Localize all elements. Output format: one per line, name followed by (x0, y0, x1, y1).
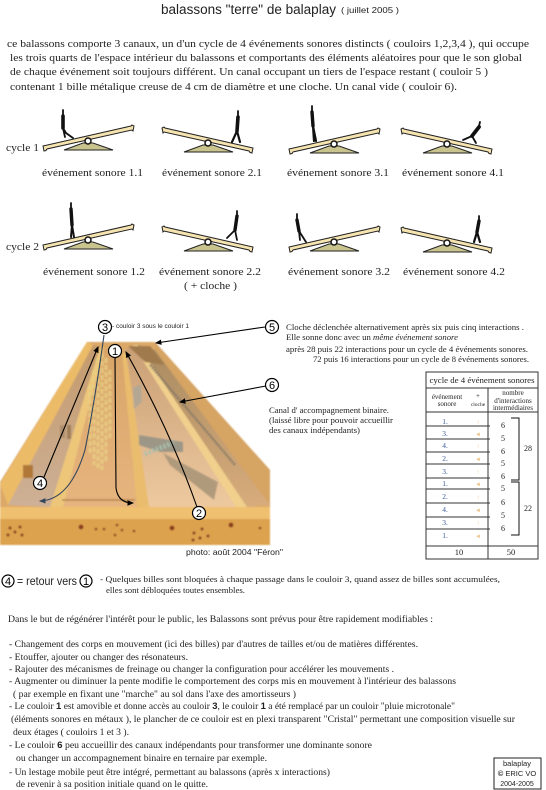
arrow corridor 4 (44, 347, 98, 477)
modifications text: deux étages ( couloirs 1 et 3 ). (13, 727, 129, 738)
marker 6: 6 (269, 380, 275, 392)
copyright box: balaplay (503, 759, 531, 768)
binary channel note (269, 405, 393, 435)
marker 2 (192, 506, 206, 520)
table bell arrows: ◄ (475, 457, 481, 463)
table title: cycle de 4 événement sonores (430, 375, 534, 385)
cycle table (426, 372, 538, 559)
legend: 4 returns to 1: 1 (83, 576, 89, 588)
event 4.1 (401, 122, 504, 179)
marker 3 note: - couloir 3 sous le couloir 1 (112, 324, 190, 330)
marker 1 (108, 344, 122, 358)
table event numbers: 3. (442, 429, 448, 438)
table bell arrows: ◄ (475, 534, 481, 540)
marker 3 (98, 320, 112, 334)
table bell arrows: ↑ (476, 470, 480, 476)
table event numbers: 1. (442, 417, 448, 426)
brackets with totals: 22 (524, 504, 532, 513)
marker 5: 5 (269, 322, 275, 334)
modifications text: - Le couloir 1 est amovible et donne accès au couloir 3, le couloir 1 a été remplacé par un couloir "pluie microtonale" (9, 701, 455, 712)
modifications text: - Changement des corps en mouvement (ici des billes) par d'autres de tailles et/ou de matières différentes. (9, 639, 418, 650)
modifications text: - Rajouter des mécanismes de freinage ou changer la configuration pour accélérer les mouvements . (9, 664, 394, 675)
binary channel note: Canal d' accompagnement binaire. (269, 405, 389, 415)
title: ( juillet 2005 ) (341, 5, 399, 15)
modifications text: - Un lestage mobile peut être intégré, permettant au balassons (après x interactions) (9, 767, 330, 778)
legend: 4 returns to 1 (2, 575, 92, 588)
event 2.2: événement sonore 2.2 (159, 266, 261, 278)
table event numbers: 2. (442, 492, 448, 501)
event 2.2 (159, 211, 261, 292)
modifications text: - Le couloir 6 peu accueillir des canaux indépendants pour transformer une dominante sonore (9, 740, 372, 751)
event 1.2 (43, 203, 145, 278)
arrow to corridor 5 (156, 327, 265, 343)
event 2.2: ( + cloche ) (184, 280, 237, 292)
note on blocked marbles (100, 574, 500, 595)
binary channel note: des canaux indépendants) (269, 425, 360, 435)
event 3.1: événement sonore 3.1 (287, 167, 389, 179)
intro text: contenant 1 bille métalique creuse de 4 cm de diamètre et une cloche. Un canal vide ( couloir 6). (10, 82, 457, 93)
event 4.2: événement sonore 4.2 (403, 266, 505, 278)
event 3.2 (288, 214, 390, 278)
bell explanation: Elle sonne donc avec un même événement sonore (286, 332, 458, 342)
table bell arrows: ↑ (476, 420, 480, 426)
event 2.1 (162, 111, 262, 179)
table bell arrows: ↑ (476, 444, 480, 450)
event 4.1: événement sonore 4.1 (402, 167, 504, 179)
note on blocked marbles: - Quelques billes sont bloquées à chaque passage dans le couloir 3, quand assez de billes sont accumulées, (100, 574, 500, 584)
marker 6 (266, 378, 278, 392)
arrow to corridor 6 (180, 386, 266, 402)
marker 5 (266, 320, 278, 334)
event 2.1: événement sonore 2.1 (162, 167, 262, 179)
table totals: 50 (507, 547, 515, 557)
table event numbers: 3. (442, 518, 448, 527)
legend: 4 returns to 1: = retour vers (17, 576, 77, 588)
interaction counts (501, 421, 505, 533)
note on blocked marbles: elles sont débloquées toutes ensembles. (106, 585, 245, 595)
table column headers: nombre (502, 389, 524, 397)
table bell arrows (475, 420, 481, 540)
table column headers: sonore (438, 400, 456, 408)
seesaw diagrams (6, 106, 505, 292)
photo of the balassons interior (0, 342, 270, 545)
table column headers (432, 389, 533, 412)
modifications text: - Augmenter ou diminuer la pente modifie le comportement des corps mis en mouvement à l'intérieur des balassons (9, 676, 456, 687)
cycle 2 label: cycle 2 (6, 241, 39, 253)
event 3.2: événement sonore 3.2 (288, 266, 390, 278)
copyright box: 2004-2005 (500, 781, 534, 788)
arrow corridor 3 (40, 335, 104, 501)
table column headers: cloche (471, 402, 486, 408)
event 4.2 (401, 216, 505, 278)
title: balassons "terre" de balaplay (161, 2, 336, 17)
interaction counts: 5 (501, 459, 505, 468)
interaction counts: 6 (501, 524, 505, 533)
interaction counts: 5 (501, 434, 505, 443)
binary channel note: (laissé libre pour pouvoir accueillir (269, 415, 393, 425)
table column headers: intermédiaires (493, 404, 533, 412)
modifications text: (éléments sonores en métaux ), le plancher de ce couloir est en plexi transparent "Cristal" permettant une composition visuelle sur (11, 714, 516, 725)
intro text: de chaque événement soit toujours différent. Un canal occupant un tiers de l'espace restant ( couloir 5 ) (10, 67, 489, 78)
table event numbers: 3. (442, 467, 448, 476)
table bell arrows: ◄ (475, 432, 481, 438)
table bell arrows: ◄ (475, 482, 481, 488)
modifications text: ou changer un accompagnement binaire en ternaire par exemple. (16, 754, 267, 764)
interaction counts: 6 (501, 421, 505, 430)
bell explanation (286, 322, 529, 364)
marker 3: 3 (102, 322, 108, 334)
table bell arrows: ↑ (476, 495, 480, 501)
event 1.1: événement sonore 1.1 (42, 167, 143, 179)
modifications text: - Etouffer, ajouter ou changer des résonateurs. (9, 652, 188, 663)
bell explanation: Cloche déclenchée alternativement après six puis cinq interactions . (286, 322, 524, 332)
marker 4 (34, 476, 46, 490)
marker 1: 1 (112, 346, 118, 358)
bell explanation: après 28 puis 22 interactions pour un cycle de 4 événements sonores. (286, 344, 528, 354)
event 1.2: événement sonore 1.2 (43, 266, 145, 278)
marker 4: 4 (37, 478, 43, 490)
table event numbers: 1. (442, 479, 448, 488)
table column headers: + (476, 392, 480, 400)
marker 2: 2 (196, 508, 202, 520)
copyright box: © ERIC VO (498, 769, 536, 778)
modifications text: Dans le but de régénérer l'intérêt pour le public, les Balassons sont prévus pour être rapidement modifiables : (8, 614, 433, 625)
intro text: les trois quarts de l'espace intérieur du balassons et comportants des éléments aléatoires pour que le son global (10, 53, 522, 64)
interaction counts: 6 (501, 498, 505, 507)
interaction counts: 5 (501, 484, 505, 493)
table event numbers (442, 417, 448, 540)
arrow corridor 2 (126, 352, 197, 507)
copyright box (494, 758, 541, 789)
interaction counts: 6 (501, 472, 505, 481)
table event numbers: 2. (442, 454, 448, 463)
brackets with totals: 28 (524, 444, 532, 453)
interaction counts: 6 (501, 447, 505, 456)
table totals: 10 (455, 547, 463, 557)
event 3.1 (287, 106, 389, 179)
photo caption: photo: août 2004 "Féron" (186, 547, 283, 557)
bell explanation: 72 puis 16 interactions pour un cycle de 8 événements sonores. (313, 354, 529, 364)
table totals (455, 547, 515, 557)
table bell arrows: ◄ (475, 508, 481, 514)
brackets with totals (511, 418, 532, 535)
modifications text: de revenir à sa position initiale quand on le quitte. (16, 780, 208, 790)
cycle 1 label: cycle 1 (6, 142, 39, 154)
arrow corridor 1 (115, 358, 133, 503)
table event numbers: 1. (442, 531, 448, 540)
modifications text (8, 614, 516, 790)
intro text (7, 39, 529, 93)
event 1.1 (42, 110, 143, 179)
legend: 4 returns to 1: 4 (5, 576, 11, 588)
intro text: ce balassons comporte 3 canaux, un d'un cycle de 4 événements sonores distincts ( couloirs 1,2,3,4 ), qui occupe (7, 39, 529, 50)
table bell arrows: ↑ (476, 521, 480, 527)
table event numbers: 4. (442, 505, 448, 514)
modifications text: ( par exemple en fixant une "marche" au sol dans l'axe des amortisseurs ) (13, 689, 296, 700)
table column headers: événement (432, 393, 462, 401)
interaction counts: 5 (501, 511, 505, 520)
arrows and numbered markers on photo (34, 320, 278, 520)
table event numbers: 4. (442, 441, 448, 450)
table column headers: d'interactions (494, 397, 532, 405)
